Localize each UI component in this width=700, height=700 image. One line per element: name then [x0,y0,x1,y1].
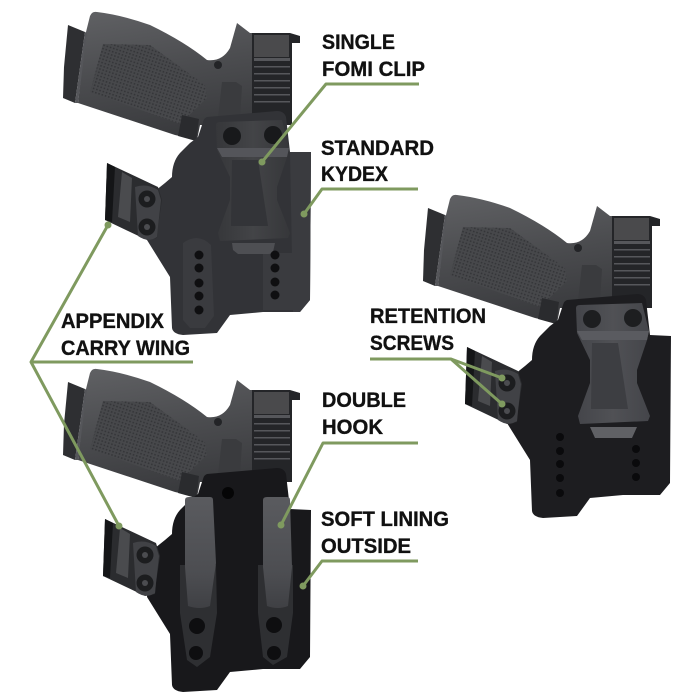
callout: soft lining outside [300,508,449,590]
clip screws [583,309,642,328]
left hook screws [189,618,205,660]
soft lined shell [147,468,311,692]
panel: single clip kydex holster [63,12,311,335]
callout: soft lining outside: SOFT LINING [321,508,449,531]
callout: double hook: HOOK [322,416,383,439]
wing with retention screws [465,347,522,424]
callout: double hook: DOUBLE [322,389,406,412]
clip logo [591,343,628,409]
callout: retention screws: RETENTION [370,305,486,328]
clip band [577,331,649,340]
callout: single fomi clip: FOMI CLIP [322,58,425,81]
belt clip [576,303,650,424]
left hook base [180,565,217,667]
screw hole [222,487,234,499]
callout: appendix carry wing: CARRY WING [61,337,190,360]
clip screws [223,126,282,145]
hook below clip [232,243,275,254]
appendix carry wing [105,163,162,240]
hook below clip [590,427,637,438]
callout: soft lining outside: OUTSIDE [321,535,411,558]
right hook screws [266,617,282,660]
callout: single fomi clip [258,31,425,166]
image: pistol, right view [423,195,660,324]
callout: standard kydex [300,137,434,218]
image: pistol, bottom view [63,369,300,498]
callout: standard kydex: KYDEX [321,163,388,186]
mounting holes [194,250,280,314]
appendix carry wing [103,519,160,596]
right hook base [258,565,293,665]
clip logo [231,160,268,226]
belt clip [216,120,290,241]
callout: double hook [278,389,418,528]
callout: single fomi clip: SINGLE [322,31,395,54]
image: pistol, top view [63,12,300,141]
mounting holes [556,433,640,497]
clip band [217,148,289,157]
shell folds and pockets [183,152,311,328]
soft lined shell [507,294,671,518]
right hook [263,497,292,608]
holster shell [147,111,311,335]
left hook [185,497,216,608]
panel: retention screws holster [423,195,671,518]
callout: retention screws [370,305,506,408]
callout: standard kydex: STANDARD [321,137,434,160]
callout: appendix carry wing [31,222,193,530]
callout: retention screws: SCREWS [370,332,454,355]
panel: double hook soft lining holster [63,369,311,692]
callout: appendix carry wing: APPENDIX [61,310,164,333]
